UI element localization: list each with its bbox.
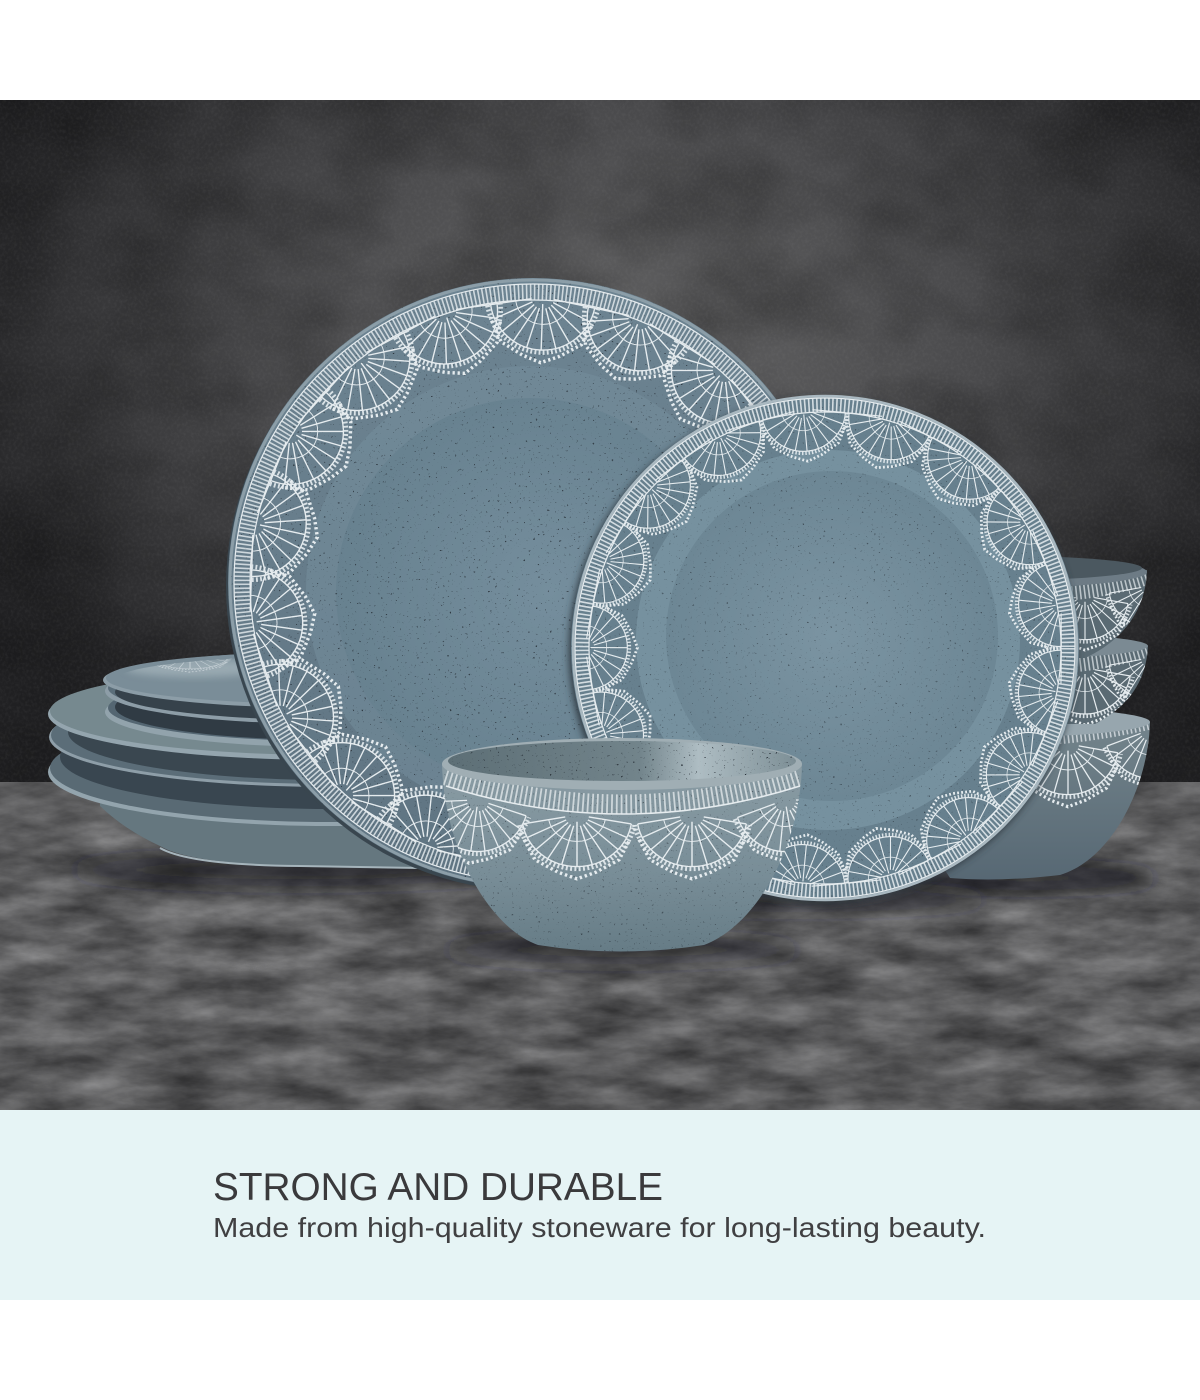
dinner plate 3	[48, 714, 612, 826]
dinner plate 2	[49, 686, 611, 809]
salad plate 2	[105, 657, 555, 740]
description: Made from high-quality stoneware for long-lasting beauty.	[213, 1212, 986, 1243]
bowl body	[442, 764, 802, 952]
bottom right bowl	[946, 712, 1150, 880]
bowl interior	[448, 741, 796, 781]
large dinner plate	[226, 278, 776, 886]
shadows on table	[70, 854, 1160, 964]
salad plate 1	[103, 654, 256, 718]
dinner plate 1	[48, 667, 612, 780]
lace border	[230, 280, 836, 886]
bowl rim	[442, 738, 802, 790]
front bowl	[442, 738, 802, 952]
plate shoulder and well	[306, 366, 754, 814]
middle right bowl	[1067, 638, 1148, 724]
speckles	[228, 278, 767, 877]
stacked bowls on right	[946, 557, 1150, 880]
salad plate 3	[105, 675, 555, 747]
product photo	[0, 100, 1200, 1110]
caption band	[0, 1110, 1200, 1300]
top right bowl	[1062, 557, 1147, 658]
lace border	[573, 396, 1077, 900]
dark textured wall	[0, 100, 1200, 784]
small salad plate	[569, 396, 1079, 903]
bowl lace and speckles	[443, 768, 802, 952]
bottom dinner plate underside and foot	[100, 790, 480, 869]
stone table surface	[0, 782, 1200, 1110]
left stack of plates	[48, 654, 418, 869]
speckles	[571, 396, 1079, 900]
heading: STRONG AND DURABLE	[213, 1166, 663, 1209]
plate shoulder and well	[636, 450, 1020, 830]
